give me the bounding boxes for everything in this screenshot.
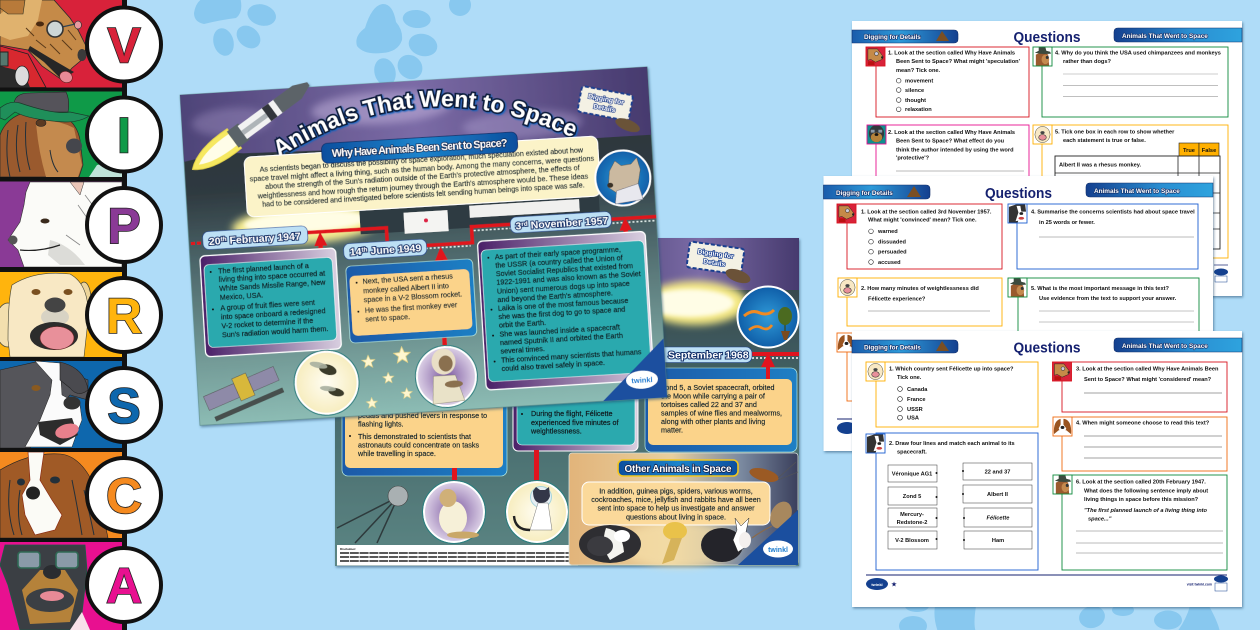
letter I: I bbox=[117, 108, 131, 164]
panel: 1947 card: A group of fruit flies were sent bbox=[220, 298, 315, 313]
panel: 1949 card: He was the first monkey ever bbox=[365, 300, 458, 315]
twinkl corner: twinkl bbox=[631, 375, 653, 385]
footer: twinkl bbox=[871, 582, 883, 587]
question 2 bbox=[867, 125, 1029, 185]
date: 14th June 1949: June 1949 bbox=[367, 242, 422, 257]
question 2: 2. Look at the section called Why Have Animals bbox=[888, 130, 1015, 136]
panel: 1947 card: White Sands Missile Range, New bbox=[219, 278, 326, 293]
letter P: P bbox=[107, 198, 141, 254]
question 6: 6. Look at the section called 20th February 1947. bbox=[1076, 480, 1206, 486]
question 2: think the author intended by using the word bbox=[896, 147, 1014, 153]
dog band group bbox=[0, 0, 122, 630]
panel: 1947 card: The first planned launch of a bbox=[218, 261, 309, 275]
tab: animals that went to space: Animals That Went to Space bbox=[1122, 33, 1208, 40]
date: 14th June 1949: 14 bbox=[349, 246, 362, 259]
panel: 1949 card: Next, the USA sent a rhesus bbox=[362, 272, 453, 286]
matching boxes: Zond 5 bbox=[903, 494, 921, 500]
icon: fruit flies circle bbox=[292, 348, 361, 417]
letter S: S bbox=[107, 378, 141, 434]
question 4: 4. When might someone choose to read this text? bbox=[1076, 420, 1210, 426]
date: 20th February 1947: th bbox=[220, 236, 227, 243]
badge: digging for details: Details bbox=[593, 103, 616, 114]
question 1: 1. Which country sent Félicette up into space? bbox=[889, 366, 1014, 372]
timeline road bbox=[752, 354, 799, 358]
purple sky header bbox=[180, 67, 651, 163]
heading pill: Other Animals in Space bbox=[624, 464, 732, 475]
true false table: False bbox=[1202, 148, 1216, 154]
text box: cockroaches, mice, jellyfish and rabbits have all been bbox=[591, 495, 761, 504]
true false table: True bbox=[1183, 148, 1195, 154]
heading: Questions bbox=[1014, 340, 1080, 356]
question 4 bbox=[1008, 204, 1198, 269]
panel: 1947 card: into space onboard a redesigned bbox=[221, 306, 326, 321]
panel: astronauts card: while travelling in space. bbox=[357, 449, 436, 458]
panel: 1947 card: Mexico, USA. bbox=[219, 290, 263, 302]
date: 20th February 1947 bbox=[202, 226, 308, 250]
panel: 1957 card: Union) sent numerous dogs up into space bbox=[497, 279, 630, 296]
panel: astronauts card: flashing lights. bbox=[358, 420, 404, 428]
text box: questions about living in space. bbox=[626, 512, 726, 522]
footer badge bbox=[1214, 265, 1228, 282]
question 3 bbox=[1052, 362, 1227, 412]
badge: digging for details: Digging for bbox=[697, 249, 734, 261]
panel: 1957 card: Soviet Socialist Republics that existed from bbox=[496, 261, 633, 278]
icon: mouse bbox=[752, 498, 796, 538]
question 5: each statement is true or false. bbox=[1063, 138, 1146, 144]
panel: 1957 card: orbit the Earth. bbox=[499, 318, 546, 330]
tab: animals that went to space: Animals That Went to Space bbox=[1094, 188, 1180, 195]
date: 3rd November 1957: 3 bbox=[515, 220, 522, 233]
question 1 bbox=[866, 362, 1038, 427]
footer: ★ bbox=[891, 580, 897, 588]
question 1: Tick one. bbox=[897, 375, 922, 381]
twinkl corner bbox=[738, 510, 798, 565]
text box: sent into space to help us investigate and answer bbox=[597, 504, 755, 513]
panel: Zond 5 card: matter. bbox=[661, 426, 683, 434]
question 1: dissuaded bbox=[878, 240, 906, 246]
heading: Questions bbox=[985, 186, 1052, 202]
text box bbox=[582, 482, 770, 525]
icon: cockroach bbox=[748, 462, 798, 485]
question 5 bbox=[1033, 125, 1228, 258]
letter R: R bbox=[106, 288, 142, 344]
question 6 bbox=[1053, 475, 1227, 570]
text box: why sent: weightlessness and how rough the return journey through the Earth's atmosphere would be. These ideas bbox=[256, 171, 589, 200]
text box: why sent bbox=[244, 136, 601, 217]
heading: Questions bbox=[1014, 30, 1080, 46]
icon: dirt mound bbox=[614, 115, 642, 135]
letter C: C bbox=[106, 468, 142, 524]
panel: astronauts card: pedals and pushed levers in response to bbox=[358, 411, 487, 420]
question 4 bbox=[1053, 417, 1227, 471]
panel: Felicette card: During the flight, Félicette bbox=[531, 409, 613, 418]
question 6: What does the following sentence imply about bbox=[1084, 488, 1208, 494]
icon: rabbit bbox=[701, 518, 751, 562]
timeline road bbox=[191, 212, 657, 263]
icon: satellite bbox=[201, 362, 284, 422]
panel: Zond 5 card: the Moon while carrying a pair of bbox=[661, 392, 765, 400]
footer bbox=[866, 575, 1228, 591]
date: 20th February 1947: 20 bbox=[209, 235, 221, 248]
date: 3rd November 1957: rd bbox=[521, 221, 528, 228]
panel: 1957 card: named Sputnik II and orbited the Earth bbox=[500, 331, 623, 347]
panel: astronauts card bbox=[342, 395, 507, 476]
question 1 bbox=[866, 47, 1029, 117]
icon: rocket bbox=[185, 74, 316, 179]
question 4: 4. Summarise the concerns scientists had about space travel bbox=[1031, 210, 1195, 216]
panel: Zond 5 card: samples of wine flies and mealworms, bbox=[661, 408, 782, 418]
tab: digging for details bbox=[852, 340, 958, 353]
date: September 1968: September 1968 bbox=[668, 350, 749, 362]
panel: worksheet back bbox=[852, 21, 1242, 296]
question 1: 1. Look at the section called 3rd November 1957. bbox=[861, 210, 992, 216]
question 1: accused bbox=[878, 260, 901, 266]
icon: guinea pig bbox=[579, 525, 641, 563]
badge: digging for details: Details bbox=[703, 258, 726, 268]
icon: cat circle bbox=[506, 480, 568, 544]
date: 14th June 1949: th bbox=[361, 247, 368, 254]
true false table: Albert II was a rhesus monkey. bbox=[1059, 162, 1141, 168]
question 1: France bbox=[907, 397, 926, 403]
letter C bbox=[87, 458, 161, 532]
matching boxes bbox=[888, 463, 1032, 549]
panel: worksheet middle bbox=[824, 176, 1213, 451]
question 5: Use evidence from the text to support your answer. bbox=[1039, 296, 1177, 302]
text box: why sent: As scientists began to discuss the possibility of space exploration, much speculation existed about how bbox=[259, 145, 584, 174]
matching boxes: Félicette bbox=[987, 516, 1009, 522]
heading pill: Why Have Animals Been Sent to Space? bbox=[331, 137, 508, 160]
question 3: 3. Look at the section called Why Have Animals Been bbox=[1076, 366, 1219, 372]
text box: why sent: had to be considered and investigated before scientists felt sending human beings into space was safe. bbox=[262, 180, 585, 209]
question 2: spacecraft. bbox=[897, 450, 927, 456]
icon: Laika circle bbox=[594, 149, 652, 207]
panel: 1957 card: she was the first dog to go to space and bbox=[498, 305, 626, 321]
icon: Sputnik satellite bbox=[337, 486, 408, 543]
question 5: 5. What is the most important message in this text? bbox=[1031, 286, 1169, 292]
question 1: mean? Tick one. bbox=[896, 68, 941, 74]
panel: poster page 1 bbox=[179, 66, 670, 428]
arrow: card 2 bbox=[434, 246, 448, 261]
question 5 bbox=[1008, 278, 1199, 338]
yellow glow bbox=[231, 201, 381, 248]
text box: In addition, guinea pigs, spiders, various worms, bbox=[599, 486, 753, 496]
panel: other animals in space bbox=[569, 453, 798, 567]
matching boxes: V-2 Blossom bbox=[895, 538, 929, 544]
panel: worksheet front bbox=[852, 331, 1242, 607]
question 1: USSR bbox=[907, 407, 923, 413]
icon: tortoise cargo circle bbox=[738, 286, 798, 348]
panel: 1949 card: sent to space. bbox=[365, 312, 410, 324]
letter R bbox=[87, 278, 161, 352]
icon: jellyfish bbox=[662, 522, 687, 564]
question 2: 2. Draw four lines and match each animal to its bbox=[889, 441, 1015, 447]
text box: why sent: about the strength of the Sun's radiation outside of the Earth's protective atmosphere, the effects of bbox=[265, 163, 580, 191]
panel: 1957 card: She was launched inside a spacecraft bbox=[499, 322, 620, 339]
question 6: space..." bbox=[1088, 516, 1112, 522]
question 1: movement bbox=[905, 78, 933, 84]
panel: 1957 card: could also travel safely in space. bbox=[501, 358, 605, 373]
letter S bbox=[87, 368, 161, 442]
question 2 bbox=[866, 433, 1038, 570]
yellow rocket glow bbox=[643, 281, 747, 325]
disclaimer box bbox=[337, 545, 578, 566]
panel: Felicette card bbox=[513, 390, 638, 451]
icon: dirt mound bbox=[724, 266, 752, 286]
heading pill bbox=[321, 132, 518, 164]
letter V bbox=[87, 8, 161, 82]
panel: 1947 card: living thing into space occurred at bbox=[218, 269, 325, 284]
question 2: Félicette experience? bbox=[868, 296, 926, 302]
panel: astronauts card: astronauts could concentrate on tasks bbox=[358, 440, 479, 450]
tab: digging for details: Digging for Details bbox=[864, 34, 921, 41]
panel: Felicette card: weightlessness. bbox=[530, 426, 582, 435]
question 1: Canada bbox=[907, 387, 928, 393]
connectors bbox=[452, 450, 539, 481]
panel: Felicette card: experienced five minutes of bbox=[531, 418, 618, 427]
connectors bbox=[316, 226, 634, 357]
tab: animals that went to space bbox=[1114, 338, 1242, 352]
question 3 bbox=[837, 333, 877, 401]
title: Animals That Went to Space bbox=[274, 88, 579, 155]
panel: 1957 card bbox=[477, 231, 654, 390]
twinkl corner: twinkl bbox=[768, 547, 788, 554]
tab: digging for details bbox=[852, 30, 958, 43]
question 4: rather than dogs? bbox=[1063, 59, 1112, 65]
panel: 1957 card: several times. bbox=[500, 344, 545, 356]
date: September 1968 bbox=[650, 347, 752, 362]
matching boxes: Redstone-2 bbox=[897, 520, 927, 526]
matching boxes: Mercury- bbox=[900, 512, 924, 518]
question 4 bbox=[1033, 47, 1228, 117]
badge: digging for details bbox=[686, 241, 745, 275]
panel: 1947 card: Sun's radiation would harm them. bbox=[222, 324, 329, 339]
panel: Zond 5 card: along with other plants and living bbox=[661, 417, 765, 426]
disclaimer box: Disclaimer: bbox=[340, 547, 356, 551]
footer: visit twinkl.com bbox=[1187, 582, 1212, 586]
panel: VIPERS dog strip bbox=[0, 0, 161, 630]
question 2: Been Sent to Space? What effect do you bbox=[896, 139, 1005, 145]
letter A bbox=[87, 548, 161, 622]
text box: why sent: space travel might affect a living thing, such as the human body. Among the many concerns, were questions bbox=[249, 153, 595, 183]
panel: poster page 2 bbox=[335, 238, 799, 567]
letter P bbox=[87, 188, 161, 262]
question 1: thought bbox=[905, 98, 926, 104]
question 1: What might 'convinced' mean? Tick one. bbox=[868, 218, 977, 224]
question 1: persuaded bbox=[878, 250, 907, 256]
date: 20th February 1947: February 1947 bbox=[226, 230, 301, 247]
panel: 1957 card: the USSR (a country called the Union of bbox=[495, 253, 623, 270]
matching boxes: Véronique AG1 bbox=[892, 472, 932, 478]
question 1: Been Sent to Space? What might 'speculation' bbox=[896, 59, 1021, 65]
panel: Zond 5 card bbox=[645, 366, 797, 452]
tab: digging for details bbox=[824, 185, 930, 199]
panel: 1957 card: As part of their early space programme, bbox=[495, 245, 621, 261]
matching boxes: 22 and 37 bbox=[985, 470, 1010, 476]
galaxy dust bbox=[620, 523, 740, 567]
panel: astronauts card: This demonstrated to scientists that bbox=[358, 432, 471, 441]
panel: Zond 5 card: Zond 5, a Soviet spacecraft, orbited bbox=[661, 383, 774, 392]
date: 14th June 1949 bbox=[343, 239, 427, 260]
true false table bbox=[1055, 143, 1220, 249]
tab: animals that went to space bbox=[1086, 183, 1213, 197]
question 1: silence bbox=[905, 88, 924, 94]
date: 3rd November 1957 bbox=[510, 211, 612, 233]
panel: 1947 card bbox=[200, 248, 342, 357]
question 4: 4. Why do you think the USA used chimpanzees and monkeys bbox=[1055, 50, 1221, 56]
footer bbox=[837, 419, 860, 434]
question 5: 5. Tick one box in each row to show whether bbox=[1055, 130, 1175, 136]
purple sky header bbox=[600, 238, 799, 290]
icon: monkey circle bbox=[422, 480, 486, 544]
arrow: card 3 bbox=[619, 217, 632, 231]
question 6: living things in space before this mission? bbox=[1084, 497, 1199, 503]
question 1 bbox=[837, 204, 1002, 269]
panel: 1957 card: and beyond the Earth's atmosphere. bbox=[497, 288, 613, 304]
question 2: 2. How many minutes of weightlessness did bbox=[861, 286, 979, 292]
tab: animals that went to space: Animals That Went to Space bbox=[1122, 343, 1208, 350]
tab: digging for details: Digging for Details bbox=[836, 190, 893, 197]
question 1: 1. Look at the section called Why Have Animals bbox=[888, 50, 1015, 56]
badge: digging for details: Digging for bbox=[587, 93, 625, 107]
letter V: V bbox=[107, 18, 141, 74]
question 3: Sent to Space? What might 'considered' mean? bbox=[1084, 377, 1212, 383]
panel: 1957 card: This convinced many scientists that humans bbox=[501, 347, 642, 364]
tab: animals that went to space bbox=[1114, 28, 1242, 42]
heading pill bbox=[618, 460, 738, 476]
spacecraft band bbox=[359, 196, 600, 236]
question 4: in 25 words or fewer. bbox=[1039, 220, 1095, 226]
panel: 1947 card: V-2 rocket to determine if the bbox=[221, 316, 313, 330]
letter A: A bbox=[106, 558, 142, 614]
panel: 1949 card bbox=[346, 259, 477, 343]
vertical black bar bbox=[122, 0, 127, 630]
question 1: relaxation bbox=[905, 107, 932, 113]
twinkl corner bbox=[600, 338, 667, 401]
panel: 1949 card: space in a V-2 Blossom rocket. bbox=[363, 289, 462, 304]
icon: monkey Albert II circle bbox=[414, 344, 479, 409]
question 1: USA bbox=[907, 416, 919, 422]
matching boxes: Albert II bbox=[987, 492, 1008, 498]
tab: digging for details: Digging for Details bbox=[864, 344, 921, 352]
panel: 1949 card: monkey called Albert II into bbox=[363, 281, 449, 295]
question 6: "The first planned launch of a living thing into bbox=[1084, 508, 1208, 514]
date: 3rd November 1957: November 1957 bbox=[527, 215, 609, 232]
icon: stars bbox=[361, 346, 413, 408]
question 2: 'protective'? bbox=[896, 156, 930, 162]
panel: 1957 card: 1922-1991 and was also known as the Soviet bbox=[496, 269, 641, 287]
arrow: card 1 bbox=[313, 231, 327, 246]
question 1: warned bbox=[877, 229, 898, 235]
panel: Zond 5 card: tortoises called 22 and 37 and bbox=[661, 400, 757, 409]
panel: 1957 card: Laika is one of the most famous because bbox=[498, 296, 629, 313]
question 2 bbox=[838, 278, 1002, 326]
badge: digging for details bbox=[577, 86, 633, 121]
arrow bbox=[761, 353, 775, 367]
matching boxes: Ham bbox=[992, 538, 1004, 544]
letter I bbox=[87, 98, 161, 172]
